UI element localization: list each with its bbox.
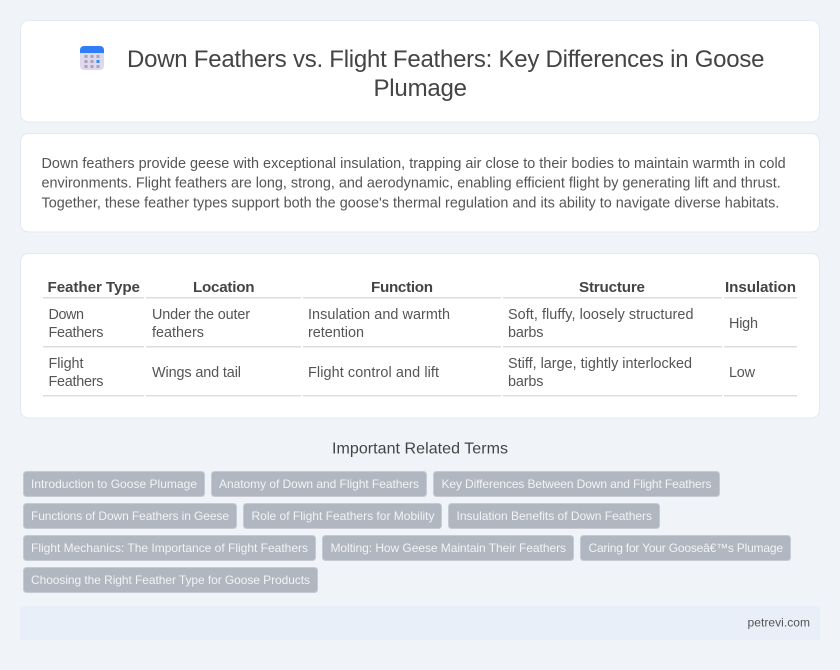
panel: introduction text: environments. Flight feathers are long, strong, and aerodynamic, enabling efficient flight by generating lift and thrust. (42, 176, 781, 192)
table row: down feathers: Feathers (48, 325, 104, 341)
table row: down feathers: Down (48, 307, 84, 323)
table row: flight feathers: Flight control and lift (308, 365, 439, 381)
table row: down feathers: feathers (152, 325, 204, 341)
title (127, 46, 764, 102)
title: Down Feathers vs. Flight Feathers: Key Differences in Goose (127, 46, 764, 73)
panel: header (20, 20, 820, 122)
related term tags: Choosing the Right Feather Type for Goose Products (31, 573, 310, 587)
table row: flight feathers: barbs (508, 374, 544, 390)
table row: flight feathers (43, 356, 797, 396)
table row: flight feathers: Stiff, large, tightly interlocked (508, 356, 692, 372)
panel: comparison table (20, 254, 820, 418)
icon: calendar (80, 46, 104, 70)
table row: flight feathers: Wings and tail (152, 365, 241, 381)
table row: flight feathers: Feathers (48, 374, 104, 390)
related term tags: Anatomy of Down and Flight Feathers (219, 477, 419, 491)
related term tags (24, 472, 790, 592)
table row: down feathers: barbs (508, 325, 544, 341)
panel: introduction text: Down feathers provide geese with exceptional insulation, trapping air close to their bodies to maintain warmth in cold (42, 156, 786, 172)
related term tags: Insulation Benefits of Down Feathers (456, 509, 652, 523)
table header row: Structure (579, 279, 645, 296)
table row: flight feathers: Flight (48, 356, 84, 372)
table header row: Insulation (725, 279, 796, 296)
table header row (43, 279, 797, 298)
table row: down feathers (43, 307, 797, 348)
heading: important related terms: Important Related Terms (332, 440, 508, 458)
table row: down feathers: Under the outer (152, 307, 250, 323)
related term tags: Introduction to Goose Plumage (31, 477, 197, 491)
related term tags: Caring for Your Gooseâ€™s Plumage (588, 541, 783, 555)
footer: petrevi.com (748, 616, 810, 630)
panel: introduction text: Together, these feather types support both the goose's thermal regulation and its ability to navigate diverse habitats. (42, 195, 779, 211)
table header row: Location (193, 279, 254, 296)
related term tags: Key Differences Between Down and Flight Feathers (442, 477, 712, 491)
table header row: Feather Type (48, 279, 140, 296)
table header row: Function (371, 279, 433, 296)
related term tags: Role of Flight Feathers for Mobility (252, 509, 434, 523)
panel: introduction text (20, 134, 820, 232)
table row: down feathers: Soft, fluffy, loosely structured (508, 307, 694, 323)
related term tags: Flight Mechanics: The Importance of Flight Feathers (31, 541, 308, 555)
related term tags: Molting: How Geese Maintain Their Feathers (330, 541, 566, 555)
table row: down feathers: High (729, 316, 758, 332)
related term tags: Functions of Down Feathers in Geese (31, 509, 229, 523)
title: Plumage (374, 75, 467, 102)
table row: flight feathers: Low (729, 365, 756, 381)
footer (20, 606, 820, 640)
table row: down feathers: Insulation and warmth (308, 307, 450, 323)
table row: down feathers: retention (308, 325, 364, 341)
